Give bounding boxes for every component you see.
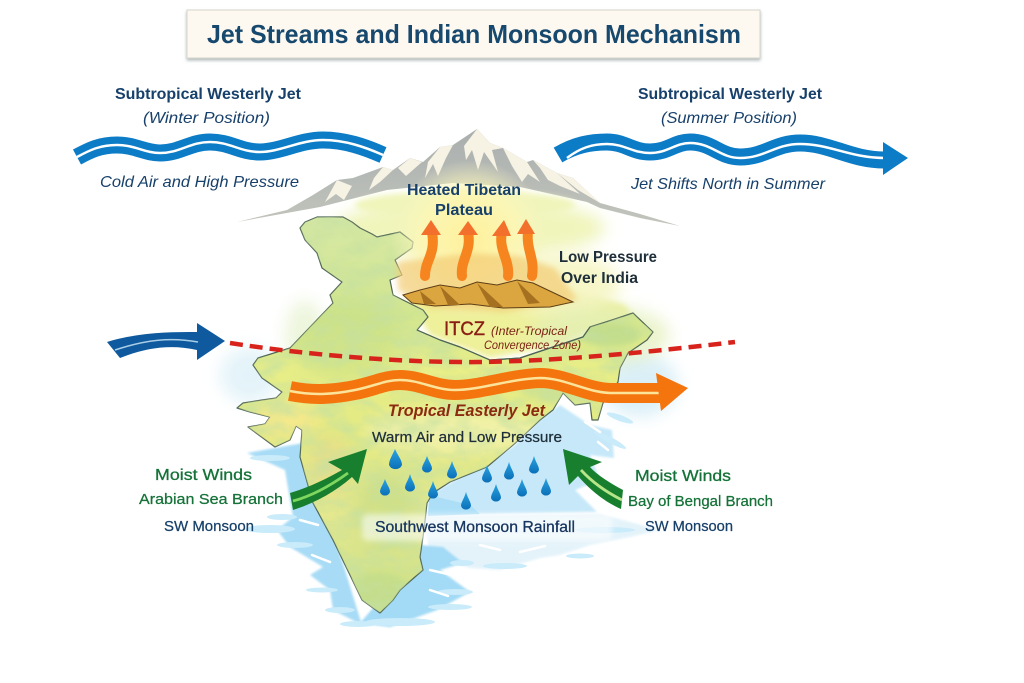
label: ITCZ: (Inter-Tropical: [491, 324, 567, 338]
bay of Bengal wash: [427, 405, 614, 515]
white wash strokes: [300, 422, 608, 596]
text: Bay of Bengal branch: Moist Winds: [635, 468, 731, 485]
label: Low Pressure Over India: Over India: [561, 270, 638, 287]
text: Arabian Sea branch: Moist Winds: [155, 467, 252, 484]
mountains: Himalaya range: [237, 129, 680, 226]
green arrow: Arabian Sea branch: [290, 449, 367, 510]
heated plateau glow: [390, 160, 578, 320]
label: Tropical Easterly Jet: Tropical Easterly Jet: [388, 401, 546, 420]
rain drops: [380, 449, 551, 510]
rising heat arrows: [421, 219, 535, 276]
brush streaks: [245, 410, 635, 627]
dark blue arrow: westerly inflow: [107, 323, 225, 360]
label: ITCZ: [444, 319, 581, 352]
text: winter jet: Cold Air and High Pressure: [100, 174, 299, 191]
label: Low Pressure Over India: Low Pressure: [559, 249, 657, 266]
label: ITCZ: Convergence Zone): [484, 338, 581, 352]
rainfall label: Southwest Monsoon Rainfall: [375, 519, 575, 536]
haze around northern India: [285, 198, 670, 370]
text: Bay of Bengal branch: Bay of Bengal Branch: [628, 493, 773, 510]
label: Heated Tibetan Plateau: Plateau: [435, 202, 493, 219]
text: summer jet: (Summer Position): [661, 110, 797, 127]
tropical easterly jet: [290, 373, 688, 411]
Arabian Sea wash: [247, 443, 362, 625]
label: ITCZ: ITCZ: [444, 319, 485, 340]
title: Jet Streams and Indian Monsoon Mechanism: [207, 19, 741, 49]
text: Bay of Bengal branch: SW Monsoon: [645, 519, 733, 535]
text: summer jet: Jet Shifts North in Summer: [630, 176, 826, 193]
text: winter jet: [100, 86, 302, 191]
title: [187, 10, 760, 58]
text: summer jet: Subtropical Westerly Jet: [638, 86, 823, 103]
sea and haze background: [220, 347, 678, 627]
label: warm air: Warm Air and Low Pressure: [372, 430, 562, 446]
Nepal border line on top of the haze: [417, 327, 590, 360]
snow caps: [325, 129, 600, 203]
label: Heated Tibetan Plateau: Heated Tibetan: [407, 182, 521, 199]
summer jet right: [558, 142, 908, 175]
text: Bay of Bengal branch: [628, 468, 773, 535]
rainfall label: [362, 514, 612, 541]
text: winter jet: (Winter Position): [143, 110, 270, 127]
text: winter jet: Subtropical Westerly Jet: [115, 86, 302, 103]
green arrow: Bay of Bengal branch: [563, 449, 623, 509]
ITCZ dashed line: [230, 342, 735, 362]
text: Arabian Sea branch: SW Monsoon: [164, 519, 254, 535]
text: Arabian Sea branch: Arabian Sea Branch: [139, 491, 283, 508]
winter jet left: [77, 140, 383, 157]
text: summer jet: [630, 86, 826, 193]
map of India: [230, 210, 660, 620]
text: Arabian Sea branch: [139, 467, 283, 535]
